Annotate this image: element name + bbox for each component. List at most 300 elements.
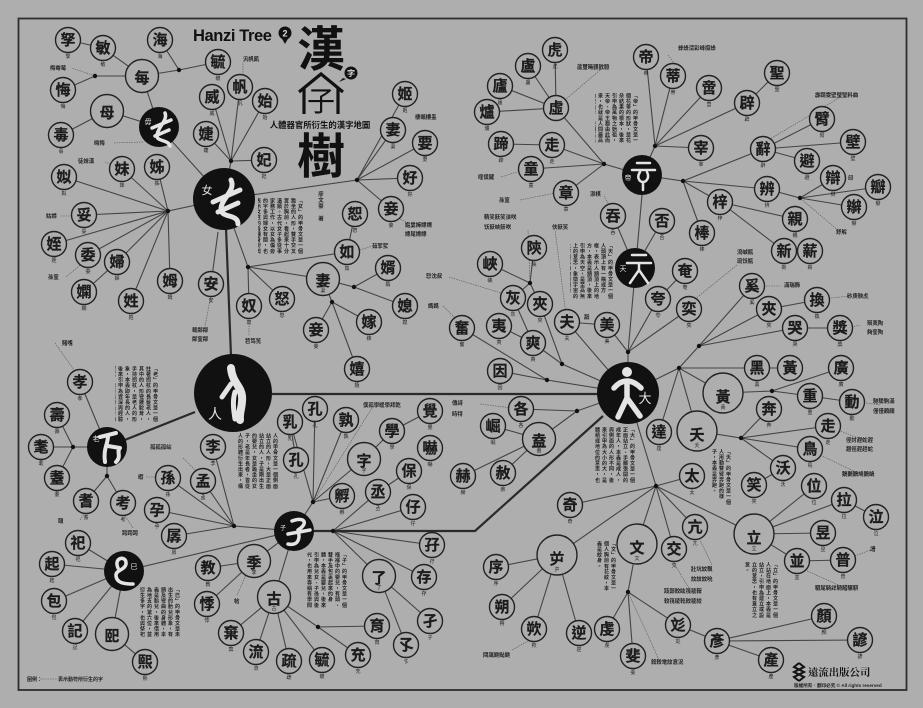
node 虎: 虎 [552, 63, 558, 70]
node 耆: 耆 [78, 492, 94, 510]
node 爽: 爽 [525, 335, 541, 352]
node 疏: 疏 [286, 674, 292, 681]
node 始: 始 [257, 93, 273, 110]
annotations: 茹挐絮 [372, 242, 389, 250]
node 嬉: 嬉 [354, 382, 360, 389]
node 廬: 廬 [497, 99, 503, 106]
node 妾: 妾 [388, 222, 394, 229]
annotations: 滿瑞飾 [784, 281, 801, 289]
node 孝: 孝 [77, 396, 83, 402]
node 妃 left: 姒 [56, 169, 72, 186]
node 帝 top: 帝 [638, 48, 654, 66]
node 動: 動 [849, 415, 855, 422]
annotations: 徑討趕蛇趕 [846, 436, 874, 444]
node 了 [362, 560, 396, 592]
node 紋: 彣 [670, 617, 686, 634]
node 帝2: 啻 [706, 101, 712, 108]
node 奚 [740, 274, 764, 306]
node 辮 [842, 194, 866, 227]
node 奕: 奕 [686, 322, 692, 329]
publisher [794, 663, 882, 689]
node 沃: 沃 [775, 460, 791, 477]
node 了: 了 [376, 584, 382, 591]
annotations: 孫窒 [48, 273, 59, 281]
node 顏 [812, 604, 836, 636]
annotations: 僅僅頗頗 [873, 407, 895, 415]
annotations: 駟尾騎詳騎醋騾騏 [815, 584, 859, 592]
node 流: 流 [248, 643, 264, 661]
node 耄: 耄 [33, 438, 49, 456]
node 悸 [194, 592, 220, 624]
hub: 女: 女 [202, 183, 212, 197]
annotations: 鵝鵝鵝鳩鵝鵠 [842, 470, 875, 478]
node 笑: 笑 [751, 498, 757, 505]
node 走 [540, 132, 564, 165]
node 汎 [228, 74, 252, 107]
node 字2: 孖 [424, 537, 440, 554]
node 要: 要 [417, 135, 433, 152]
node 峽: 峽 [487, 277, 493, 284]
node 妹: 妹 [114, 161, 130, 178]
node 孫: 孫 [160, 470, 176, 487]
node 恕: 恕 [347, 206, 363, 223]
node 交 [662, 536, 686, 569]
title [193, 24, 370, 223]
node 獎: 獎 [837, 341, 843, 348]
node 宰 [688, 136, 714, 168]
node 翌 [810, 520, 836, 553]
node 孵: 孵 [339, 509, 345, 516]
node 考: 考 [115, 495, 131, 512]
node 姬: 姬 [397, 85, 413, 103]
node 悔: 悔 [60, 103, 66, 110]
node 普: 普 [840, 573, 846, 580]
node 起: 起 [44, 556, 60, 573]
node 序: 序 [493, 580, 499, 587]
node 太: 太 [684, 468, 700, 485]
node 孫 [156, 466, 180, 498]
node 包: 包 [51, 614, 57, 621]
node 章: 章 [558, 184, 574, 202]
icon: house with child [299, 74, 343, 117]
node 真: 黃 [782, 360, 798, 377]
node 壁 [840, 130, 866, 162]
node 避: 避 [799, 153, 815, 170]
node 學: 學 [384, 422, 400, 440]
node 並: 並 [789, 553, 805, 570]
node 充 [346, 642, 370, 675]
node 契: 哭 [792, 342, 798, 348]
node 重 [798, 384, 822, 416]
node 毒 [48, 122, 74, 155]
badge: 字: 字 [347, 68, 355, 78]
node 紋: 彣 [675, 638, 681, 645]
node 蒂: 蒂 [665, 68, 681, 85]
node 孳: 孥 [60, 31, 76, 49]
node 避: 避 [804, 174, 810, 181]
node 夫: 夫 [564, 335, 570, 342]
node 立 [734, 514, 774, 554]
node 敏: 敏 [100, 61, 106, 68]
hub: 老 [87, 427, 127, 467]
node 虛 [544, 96, 568, 120]
node 妃 left [52, 164, 76, 197]
node 赫 [450, 464, 476, 496]
node 姊 [144, 154, 170, 187]
node 存: 存 [416, 568, 432, 586]
node 孵: 孵 [334, 487, 350, 505]
node 毓2: 毓 [319, 673, 325, 680]
node 序 [484, 554, 508, 587]
node 帝 top: 帝 [643, 70, 649, 77]
legend: 圖例： [27, 676, 42, 683]
node 婕: 婕 [198, 125, 214, 143]
node 虛: 虛 [548, 100, 564, 117]
node 育2: 育 [374, 639, 380, 646]
node 乳: 孔 [307, 401, 323, 418]
node 威 [200, 84, 224, 117]
node 妥 [72, 202, 96, 235]
node 換 [804, 288, 830, 320]
annotations: 賭嗜 [62, 339, 73, 347]
node 熙: 熙 [137, 654, 153, 671]
node 如: 如 [344, 265, 350, 272]
node 吞 [600, 204, 626, 236]
node 姆 [158, 268, 182, 301]
node 𠫓: 古 [266, 591, 282, 608]
node 了: 了 [371, 570, 387, 587]
node 孱: 孱 [171, 550, 177, 556]
node 李 [200, 434, 226, 467]
node 夫: 夫 [559, 314, 575, 331]
node 契: 哭 [787, 320, 803, 337]
badge: 字 [339, 66, 358, 82]
node 姓: 姓 [128, 314, 134, 321]
node 壽: 壽 [54, 428, 60, 435]
node 蓋 [516, 54, 540, 86]
node 戾 [500, 286, 526, 318]
nodes: big-person family [450, 236, 888, 680]
node 虔 [594, 616, 620, 649]
node 爽: 爽 [530, 357, 536, 363]
node 瓣 [866, 174, 890, 207]
node 奄: 奄 [677, 263, 693, 280]
node 虎: 虎 [547, 41, 563, 59]
node 奇: 奇 [567, 518, 573, 525]
node 始: 始 [262, 114, 268, 121]
node 存: 存 [421, 590, 427, 597]
node 怒 [270, 286, 294, 319]
node 妥: 妥 [81, 228, 87, 235]
node 孝 [68, 370, 92, 402]
node 毓2 [310, 648, 334, 680]
node 棒: 棒 [699, 246, 705, 253]
node 亦: 各 [513, 400, 529, 418]
node 疏 [276, 648, 302, 681]
node 考: 考 [120, 517, 126, 523]
node 囚: 因 [492, 363, 508, 380]
node 始 [252, 88, 278, 121]
node 妾: 妾 [383, 200, 399, 218]
node 育2: 育 [369, 617, 385, 635]
annotations: 帖 [234, 597, 240, 605]
node 季: 季 [246, 555, 262, 572]
node 赦: 赦 [495, 465, 511, 482]
node 高 [798, 436, 822, 469]
node 奄 [672, 258, 698, 291]
node 𠫓 [258, 580, 290, 614]
node 盧: 爐 [484, 125, 490, 132]
node 達 [646, 420, 672, 452]
node 妃: 妃 [256, 152, 272, 169]
node 悔: 悔 [55, 81, 71, 99]
node 悔 [50, 78, 76, 110]
node 臂: 臂 [819, 132, 825, 139]
node 妻2: 妾 [313, 343, 319, 350]
node 夫 [554, 310, 580, 342]
node 否: 否 [659, 235, 665, 241]
node 奴: 奴 [241, 298, 257, 315]
hub: 巳: 巳 [130, 563, 138, 571]
node 產 [758, 648, 784, 680]
author: 廖文豪 著 [317, 190, 324, 223]
node 威: 威 [204, 88, 220, 106]
hub: 天: 天 [620, 265, 626, 273]
node 辯: 辯 [830, 191, 836, 198]
node 乳 [302, 396, 328, 429]
node 巸: 巸 [104, 628, 120, 645]
node 薪: 薪 [802, 242, 818, 260]
node 泣: 泣 [868, 508, 884, 526]
node 姪: 姪 [51, 257, 57, 264]
node 沃: 沃 [780, 481, 786, 488]
node 朔: 朔 [499, 620, 505, 627]
node 翌: 昱 [815, 525, 831, 542]
node 斐 [620, 644, 646, 676]
node 否 [650, 208, 674, 241]
annotations: 砂庚鞅虎 [847, 292, 869, 300]
hub: 老: 老 [92, 434, 100, 443]
node 保: 保 [401, 463, 417, 480]
node 文: 文 [634, 555, 640, 562]
node 教 [196, 556, 220, 588]
annotations: 夠奎陶 [867, 328, 884, 336]
nodes: child family [144, 396, 444, 681]
node 恕 [342, 202, 368, 234]
node 位: 位 [806, 477, 822, 495]
node 字2 [420, 532, 444, 565]
node 學 [380, 418, 404, 451]
node 妻: 妻 [390, 143, 396, 150]
node 育2 [364, 614, 390, 646]
node 峽: 峽 [482, 256, 498, 273]
node 承 [366, 480, 390, 512]
annotations: 趨徑趕趕蛇 [846, 445, 874, 453]
node 妻2 [304, 318, 328, 350]
annotations: 僕孤學暖學拜乾 [363, 401, 401, 409]
node 拉: 拉 [836, 491, 852, 509]
node 妻 [380, 118, 406, 150]
node 夷: 夷 [491, 318, 507, 335]
text block: 文: 「文」的甲骨文是一個人胸前有花紋，本義是紋身。 [596, 541, 616, 591]
node 耄 [28, 434, 54, 467]
node 屰: 屰 [554, 566, 560, 573]
node 廌: 廣 [833, 359, 849, 377]
node 孔2: 孔 [293, 473, 299, 480]
node 亦: 各 [518, 422, 524, 429]
node 孟: 孟 [195, 473, 211, 490]
node 紋 [666, 612, 690, 645]
node 爽 [520, 330, 546, 363]
node 辛: 梓 [712, 193, 728, 211]
node 童 [518, 156, 544, 189]
node 夾: 夾 [532, 296, 548, 313]
node 棒: 棒 [694, 224, 710, 242]
node 李: 李 [210, 461, 216, 467]
node 每 large [126, 60, 158, 92]
node 姆: 姆 [167, 294, 173, 301]
node 婕 [194, 122, 218, 154]
node 棄: 棄 [223, 624, 239, 642]
node 吞: 吞 [605, 208, 621, 225]
annotations: 嫖尾嫖嫖 [405, 230, 427, 238]
node 委 [76, 242, 100, 275]
node 耋: 耋 [49, 469, 65, 487]
node 位: 位 [811, 499, 817, 506]
node 帝2 [696, 76, 722, 108]
legend [27, 676, 103, 683]
node 姪: 姪 [46, 236, 62, 253]
node 辨 [754, 176, 780, 209]
node 保: 保 [406, 484, 412, 491]
node 契 [782, 316, 808, 348]
node 疏: 疏 [281, 652, 297, 670]
brand: Hanzi Tree: Hanzi Tree [193, 27, 272, 45]
hub: 毋: 毋 [144, 118, 152, 126]
node 充: 充 [355, 668, 361, 675]
node 崛 [480, 414, 506, 446]
node 孰: 孰 [343, 433, 349, 440]
node 毓2: 毓 [314, 651, 330, 669]
node 海: 海 [157, 53, 163, 60]
node 妾 [378, 196, 404, 229]
node 孑 [418, 608, 442, 641]
node 威: 威 [209, 110, 215, 117]
annotations: 跨跨跨 [122, 529, 139, 537]
node 蓋2: 盍 [531, 432, 547, 450]
node 文: 文 [629, 539, 645, 557]
publisher name: 遠流出版公司 [808, 666, 870, 679]
node 流 [244, 640, 268, 672]
node 流: 流 [253, 665, 259, 672]
node 走: 走 [544, 137, 560, 154]
annotations: 徒妹漢 [78, 157, 95, 165]
node 要 [412, 130, 438, 163]
node 奇: 奇 [562, 497, 578, 514]
node 耄: 耄 [38, 460, 44, 467]
node 美: 美 [604, 338, 610, 345]
hub: 天 [615, 248, 655, 288]
node 安: 安 [203, 275, 219, 293]
annotations: 怒沈叔 [426, 272, 443, 280]
annotations: 喹僕腱 [478, 173, 495, 181]
node 悸: 悸 [204, 617, 210, 624]
annotations: 姑婦 [46, 212, 57, 220]
node 亦 [508, 396, 534, 429]
node 瓣: 瓣 [870, 179, 886, 196]
node 承: 丞 [375, 505, 381, 512]
node 孑: 孑 [422, 613, 438, 630]
node 朔: 朔 [494, 599, 510, 616]
node 嫁: 嫁 [361, 313, 377, 331]
node 毒: 毒 [58, 148, 64, 155]
annotations: 裁鄰鄰 [192, 326, 209, 334]
node 走3: 走 [825, 440, 831, 446]
copyright: 版權所有．翻印必究 © All rights reserved [794, 682, 882, 689]
node 妹 [110, 156, 134, 189]
node 僖: 媳 [402, 319, 408, 326]
node 欮: 欮 [526, 621, 542, 638]
node 辛: 梓 [717, 215, 723, 222]
node 夸 [646, 286, 670, 319]
node 覺 [418, 398, 442, 431]
node 姊: 姊 [149, 158, 165, 176]
icon: number pin [278, 26, 292, 44]
node 辯 [820, 166, 846, 198]
annotations: 晦悔 [94, 139, 105, 147]
node 孱: 孱 [166, 528, 182, 545]
node 覺: 覺 [422, 402, 438, 420]
node 巸 [96, 618, 128, 650]
node 宰: 宰 [698, 161, 704, 168]
node 孝: 孝 [72, 373, 88, 391]
node 黑: 黑 [754, 382, 760, 388]
node 薪 [798, 238, 822, 271]
node 戾: 灰 [510, 311, 516, 318]
annotations: 琉饫瓶 [737, 257, 754, 265]
node 嫻: 嫻 [76, 284, 92, 301]
connector lines [41, 40, 880, 662]
node 黃 [703, 373, 743, 413]
node 拉: 拉 [841, 513, 847, 520]
node 奕: 奕 [681, 300, 697, 318]
node 新: 新 [776, 242, 792, 260]
annotations: 孤孤孤岾 [150, 443, 172, 451]
node 屰 [537, 535, 577, 575]
node 走2 [756, 396, 782, 429]
annotations: 汎帆飢 [243, 55, 260, 63]
node 立: 立 [751, 545, 757, 552]
node 如: 如 [339, 244, 355, 261]
node 諺: 諺 [852, 631, 868, 649]
annotations: 流峸瓶 [737, 248, 754, 256]
annotations: 暇 [138, 474, 144, 481]
node 委: 委 [85, 268, 91, 275]
annotations: 馳驗駒滿 [873, 397, 895, 405]
node 文 [617, 524, 657, 564]
nodes: emperor family [474, 38, 890, 271]
node 笑 [742, 472, 766, 505]
node 吞: 吞 [610, 230, 616, 236]
node 盧 [474, 100, 500, 132]
node 婦 [104, 250, 130, 282]
annotations: 跂鄭較眩筏稜鞍 [664, 587, 702, 595]
node 薪: 薪 [807, 264, 813, 271]
node 充: 充 [350, 646, 366, 664]
node 蓋: 盧 [525, 79, 531, 86]
node 新: 新 [781, 264, 787, 271]
node 包: 包 [46, 592, 62, 610]
